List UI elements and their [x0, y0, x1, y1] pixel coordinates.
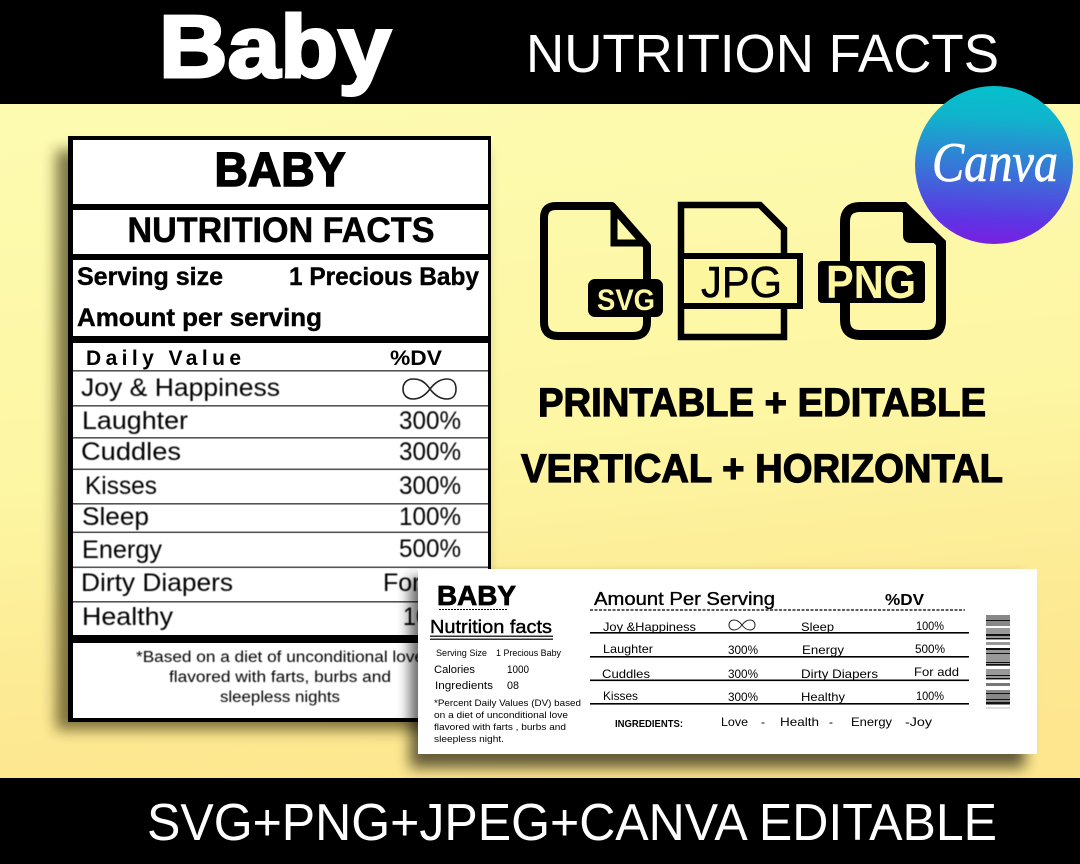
icon: small infinity: [729, 620, 755, 630]
bottom banner: [0, 778, 1080, 864]
left column: Serving Size: [436, 648, 487, 659]
table rows: [590, 619, 969, 705]
table rows: Cuddles: [602, 667, 650, 681]
label: daily value table: Sleep: [82, 503, 149, 531]
label: title box: [73, 140, 488, 204]
icon: SVG file: [544, 206, 663, 336]
left column: flavored with farts , burbs and: [434, 722, 566, 733]
left column: 08: [507, 680, 519, 692]
label: footnote box: sleepless nights: [220, 689, 340, 706]
icon: JPG file: [681, 205, 800, 337]
table rows: 300%: [728, 667, 758, 681]
label: daily value table: Joy & Happiness: [81, 374, 280, 402]
left column: *Percent Daily Values (DV) based: [434, 698, 581, 709]
label: serving box: Serving size: [77, 263, 223, 291]
label: daily value table: Energy: [82, 536, 162, 564]
table rows: 100%: [916, 619, 944, 633]
table rows: Healthy: [801, 690, 845, 704]
label: daily value table: Daily Value: [86, 347, 241, 370]
table heading: [590, 589, 965, 610]
table rows: Sleep: [801, 620, 834, 634]
ingredients row: Energy: [851, 715, 892, 729]
label: daily value table: 300%: [399, 438, 461, 466]
left column: Ingredients: [435, 680, 494, 692]
label: daily value table: 300%: [399, 472, 461, 500]
table rows: 100%: [916, 689, 944, 703]
ingredients row: Love: [721, 715, 748, 729]
barcode: [986, 615, 1010, 709]
label: nutrition facts box: NUTRITION FACTS: [128, 211, 434, 250]
left column: 1000: [507, 664, 529, 676]
label: daily value table: Kisses: [85, 472, 157, 500]
ingredients row: -Joy: [905, 715, 932, 729]
heading: printable + editable: PRINTABLE + EDITABLE: [538, 381, 986, 425]
label: title box: BABY: [214, 144, 346, 197]
icon: PNG file: [818, 203, 946, 335]
ingredients row: -: [761, 715, 765, 729]
label: nutrition facts box: [73, 210, 488, 254]
label: serving box: Amount per serving: [77, 304, 322, 332]
ingredients row: INGREDIENTS:: [615, 719, 683, 730]
heading: vertical + horizontal: VERTICAL + HORIZONTAL: [521, 447, 1003, 491]
table rows: 300%: [728, 690, 758, 704]
badge: Canva logo: [915, 86, 1073, 244]
left column: Calories: [434, 664, 475, 676]
table rows: Energy: [802, 643, 844, 657]
label: daily value table: 300%: [399, 407, 461, 435]
label: daily value table: Laughter: [82, 407, 188, 435]
icon: PNG file: PNG: [826, 256, 916, 308]
left column: [430, 580, 581, 745]
table rows: 300%: [728, 643, 758, 657]
label: daily value table: Healthy: [82, 603, 174, 631]
label: footnote box: [73, 643, 488, 718]
label: daily value table: Dirty Diapers: [81, 569, 233, 597]
label: daily value table: 500%: [399, 535, 461, 563]
label: serving box: 1 Precious Baby: [289, 263, 479, 291]
table heading: %DV: [885, 592, 924, 609]
table rows: Joy &Happiness: [603, 620, 696, 634]
icon: SVG file: SVG: [597, 284, 655, 317]
top banner: [0, 0, 1080, 104]
table rows: Dirty Diapers: [801, 667, 878, 681]
icon: JPG file: JPG: [701, 258, 782, 307]
ingredients row: -: [829, 715, 833, 729]
left column: sleepless night.: [434, 734, 504, 745]
label: daily value table: Cuddles: [81, 438, 181, 466]
table rows: 500%: [915, 642, 945, 656]
icon: infinity: [403, 379, 456, 399]
label: footnote box: *Based on a diet of unconditional love: [136, 649, 424, 666]
ingredients row: [615, 715, 932, 730]
vertical label panel: [56, 136, 491, 730]
formats heading: SVG+PNG+JPEG+CANVA EDITABLE: [147, 794, 997, 852]
left column: Nutrition facts: [430, 617, 552, 637]
label: footnote box: flavored with farts, burbs and: [169, 669, 391, 686]
label: daily value table: %DV: [390, 347, 442, 370]
label: daily value table: 100%: [403, 603, 463, 631]
table rows: Kisses: [603, 689, 638, 703]
table rows: For add: [914, 665, 959, 679]
label: daily value table: 100%: [399, 503, 461, 531]
label: daily value table: [73, 343, 488, 635]
heading: nutrition facts: NUTRITION FACTS: [526, 24, 999, 84]
left column: on a diet of unconditional love: [434, 710, 568, 721]
table heading: Amount Per Serving: [594, 589, 775, 609]
left column: 1 Precious Baby: [496, 648, 561, 659]
badge: Canva logo: Canva: [932, 132, 1058, 194]
table rows: Laughter: [603, 642, 653, 656]
label: daily value table: For add: [383, 569, 469, 597]
table rows: [73, 370, 488, 603]
ingredients row: Health: [780, 715, 819, 729]
horizontal label panel: [410, 569, 1037, 768]
label: serving box: [73, 260, 488, 336]
left column: BABY: [437, 580, 516, 611]
